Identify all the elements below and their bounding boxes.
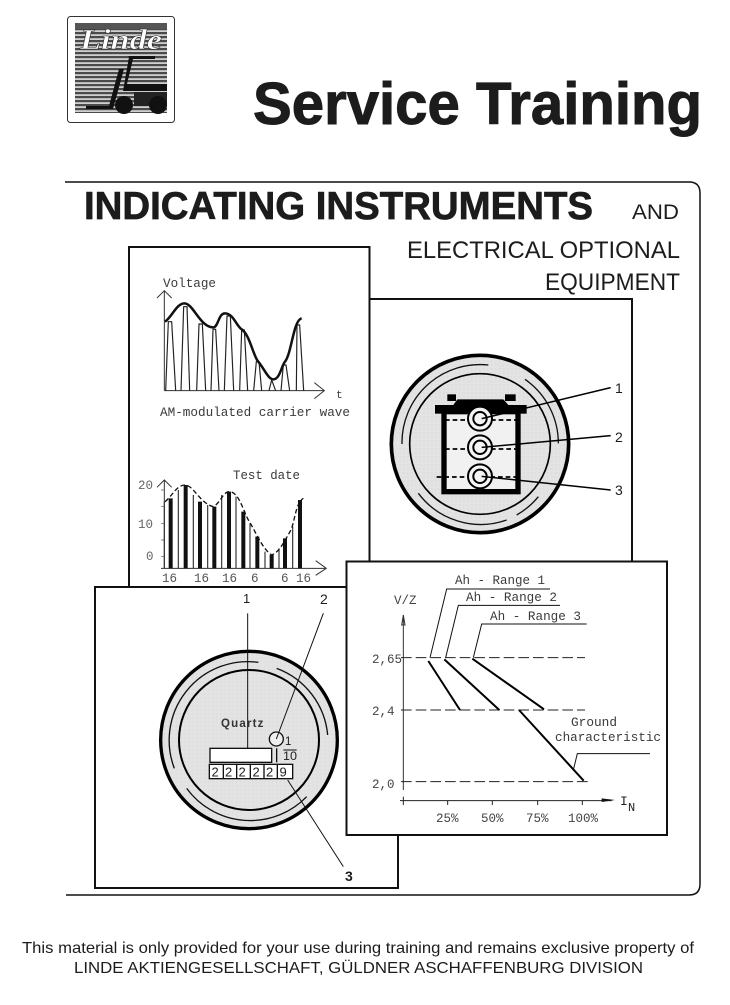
logo: Linde forklift badge (68, 16, 174, 122)
callout numbers 1 2 3: 1 (615, 380, 623, 396)
title: Service Training: Service Training (253, 71, 702, 137)
x axis percentages: 50% (481, 812, 504, 826)
x axis percentages: 75% (526, 812, 549, 826)
heading: Electrical Optional: ELECTRICAL OPTIONAL (407, 237, 680, 264)
label: V/Z: V/Z (394, 594, 417, 608)
panel: Ah range characteristic chart (346, 562, 667, 835)
heading: Indicating Instruments: INDICATING INSTRUMENTS (84, 185, 593, 228)
axis dates (162, 572, 311, 586)
icon: quartz hour meter dial (161, 613, 343, 867)
x axis percentages (436, 812, 599, 826)
y axis labels: 2,0 (372, 778, 395, 792)
heading: Equipment: EQUIPMENT (545, 269, 680, 296)
axis dates: 16 (222, 572, 237, 586)
fraction: 1/10: 1 (285, 736, 291, 748)
callout number 3: 3 (345, 868, 353, 884)
chart: AM-modulated carrier wave (157, 291, 324, 399)
callout numbers 1 2 3: 2 (615, 429, 623, 445)
label: Test date: Test date (233, 469, 300, 483)
x axis percentages: 100% (568, 812, 599, 826)
callout number 2: 2 (320, 591, 328, 607)
chart: test date bars (157, 480, 326, 575)
callout numbers 1 2 3 (615, 380, 623, 498)
axis values: 20 10 0: 10 (138, 518, 153, 532)
x axis label: I N: I (620, 794, 628, 809)
chart: voltage vs current lines (400, 589, 650, 805)
y axis labels: 2,4 (372, 705, 395, 719)
x axis percentages: 25% (436, 812, 459, 826)
outer rounded frame (65, 182, 700, 895)
counter digits: 2 (238, 764, 246, 780)
label: Ground characteristic: Ground (571, 716, 617, 730)
axis dates: 6 (251, 572, 259, 586)
label: t: t (336, 390, 343, 402)
axis dates: 16 (162, 572, 177, 586)
axis values: 20 10 0 (138, 479, 154, 564)
axis dates: 6 (281, 572, 289, 586)
panel: Ah range characteristic chart: characteristic (555, 731, 661, 745)
footer: usage notice line 2: LINDE AKTIENGESELLSCHAFT, GÜLDNER ASCHAFFENBURG DIVISION (74, 959, 643, 977)
label: AM-modulated carrier wave: AM-modulated carrier wave (160, 406, 350, 420)
axis values: 20 10 0: 0 (146, 550, 154, 564)
axis dates: 16 (296, 572, 311, 586)
counter digits: 2 (252, 764, 260, 780)
panel: operating hours meter (95, 587, 398, 888)
label: Quartz: Quartz (221, 718, 265, 730)
counter digits: 9 (280, 764, 287, 780)
icon: battery dial (391, 355, 611, 533)
footer: usage notice line 1: This material is only provided for your use during training and remains exclusive property of (22, 940, 695, 957)
panel: battery gauge (370, 299, 632, 561)
callout number 1: 1 (243, 591, 250, 606)
counter digits (212, 764, 287, 780)
fraction: 1/10 (283, 736, 297, 763)
counter digits: 2 (212, 764, 219, 780)
label: Voltage: Voltage (163, 277, 216, 291)
y axis labels (372, 653, 402, 792)
fraction: 1/10: 10 (283, 751, 297, 763)
heading: And: AND (632, 200, 679, 224)
counter digits: 2 (266, 764, 273, 780)
callout numbers 1 2 3: 3 (615, 482, 623, 498)
axis dates: 16 (194, 572, 209, 586)
label: Ah Range 3: Ah - Range 3 (490, 610, 581, 624)
x axis label: I N: N (628, 801, 635, 815)
x axis label: I N (620, 794, 635, 815)
axis values: 20 10 0: 20 (138, 479, 153, 493)
logo: Linde forklift badge: Linde (79, 24, 162, 56)
panel: waveform charts (129, 247, 370, 587)
counter digits: 2 (225, 764, 232, 780)
label: Ah Range 1: Ah - Range 1 (455, 574, 545, 588)
label: Ah Range 2: Ah - Range 2 (466, 591, 557, 605)
y axis labels: 2,65 (372, 653, 402, 667)
